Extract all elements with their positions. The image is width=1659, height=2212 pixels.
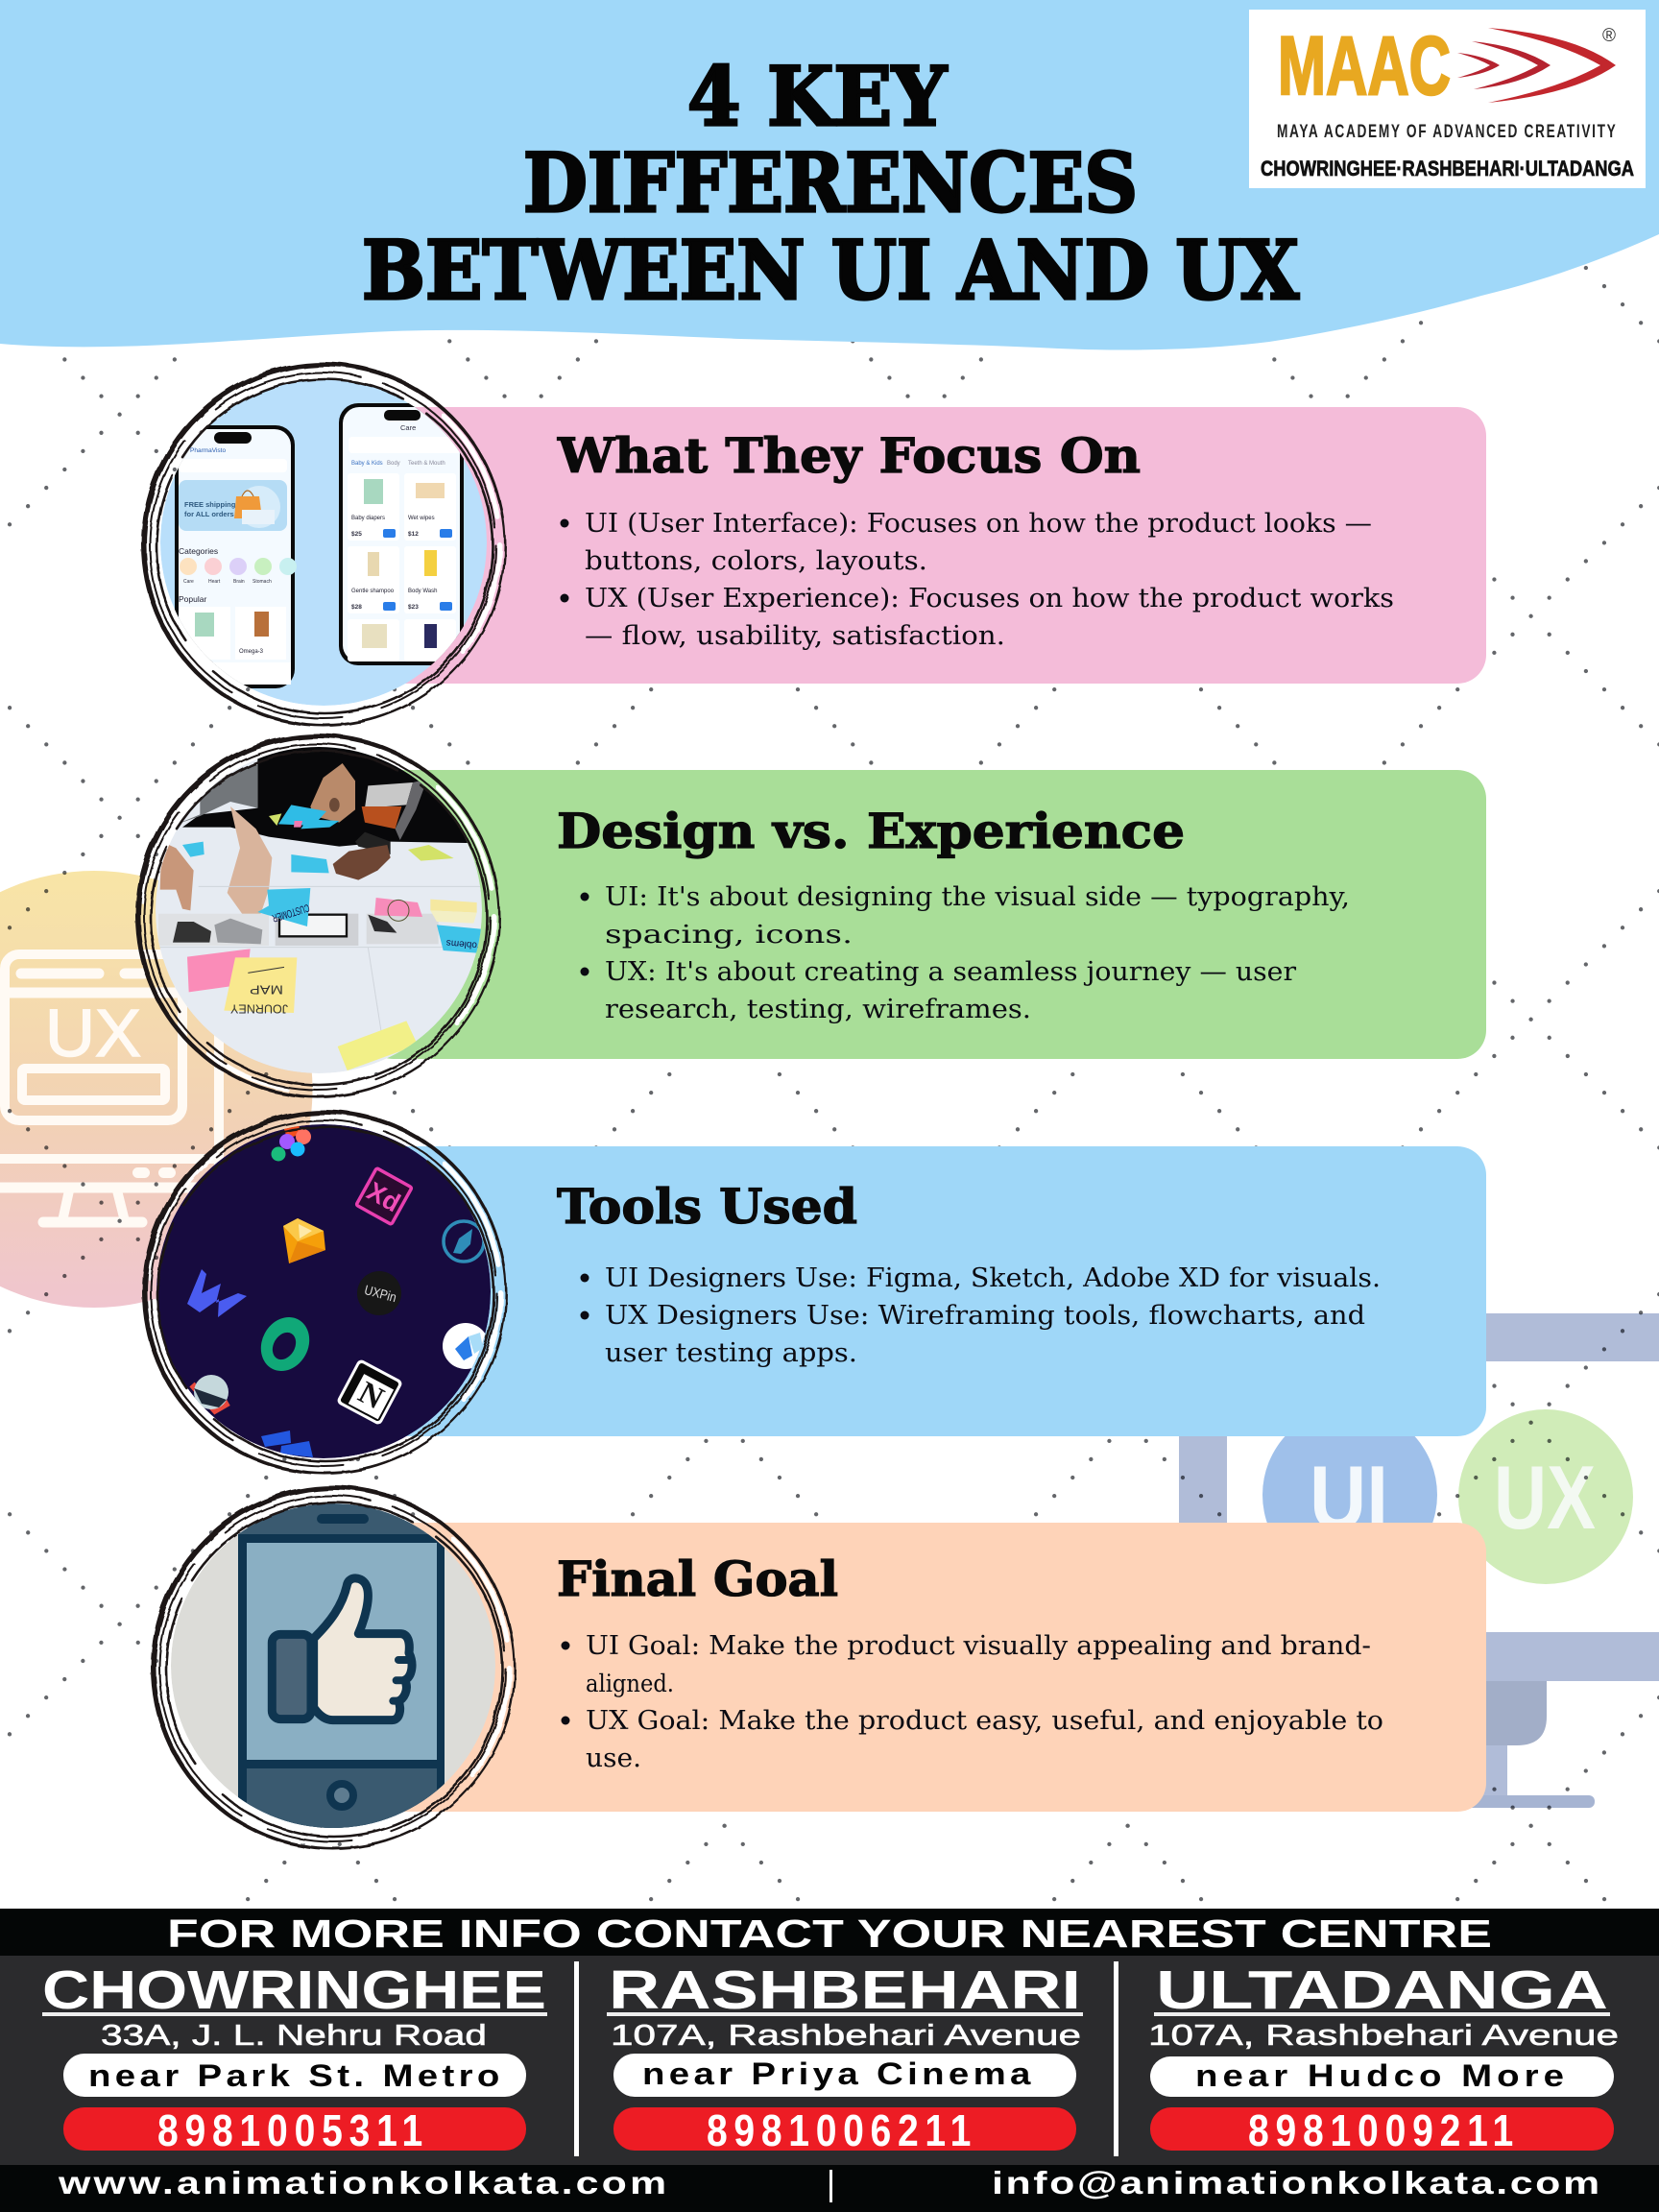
text block: aligned. bbox=[586, 1670, 674, 1697]
title: BETWEEN UI AND UX bbox=[362, 223, 1300, 318]
left phone: FREE shipping bbox=[184, 500, 236, 509]
title bbox=[362, 49, 1300, 318]
centre: chowringhee bbox=[42, 1960, 547, 2156]
website and email: info@animationkolkata.com bbox=[992, 2166, 1599, 2201]
website and email bbox=[58, 2166, 1599, 2202]
centre: rashbehari: 107A, Rashbehari Avenue bbox=[611, 2018, 1081, 2052]
centre: chowringhee: 33A, J. L. Nehru Road bbox=[101, 2018, 487, 2052]
text block bbox=[580, 1263, 1381, 1368]
panel: final goal bbox=[365, 1523, 1486, 1812]
icon: sketch bbox=[283, 1218, 325, 1263]
left phone: Brain bbox=[233, 579, 245, 585]
heading: Tools Used bbox=[557, 1178, 857, 1235]
header wave bbox=[0, 0, 1659, 350]
right phone: Teeth & Mouth bbox=[408, 461, 445, 467]
right phone: Baby & Kids bbox=[351, 461, 383, 467]
image: sticky notes photo circle: CUSTOMER bbox=[271, 902, 311, 924]
image: sticky notes photo circle bbox=[135, 733, 500, 1098]
icon: notion bbox=[336, 1358, 403, 1426]
title: 4 KEY bbox=[687, 49, 948, 144]
centre: chowringhee: CHOWRINGHEE bbox=[42, 1960, 546, 2021]
image: app phones circle bbox=[141, 362, 506, 727]
icon: white circle bbox=[443, 1323, 489, 1369]
right phone: Care bbox=[400, 423, 416, 432]
text block: UI (User Interface): Focuses on how the product looks — bbox=[585, 509, 1372, 539]
right phone: $12 bbox=[408, 531, 419, 538]
background icon: UI UX monitor bbox=[1179, 1313, 1659, 1808]
image: phone thumbs-up circle bbox=[151, 1485, 516, 1855]
icon: rocket bbox=[444, 1221, 484, 1262]
panel: design vs experience bbox=[365, 770, 1486, 1059]
right phone bbox=[339, 403, 464, 665]
centre: rashbehari bbox=[607, 1960, 1083, 2156]
left phone: Stomach bbox=[252, 579, 272, 585]
right phone: $28 bbox=[351, 604, 362, 611]
text block: UX Goal: Make the product easy, useful, and enjoyable to bbox=[586, 1706, 1383, 1736]
logo: MAAC bbox=[1249, 10, 1646, 188]
right phone: Body bbox=[387, 461, 400, 467]
footer: contact band bbox=[0, 1909, 1659, 2212]
text block bbox=[561, 1631, 1383, 1773]
background icon: UX monitor: UX bbox=[45, 996, 141, 1070]
text block: use. bbox=[586, 1743, 641, 1773]
right phone: Gentle shampoo bbox=[351, 589, 395, 594]
centre: rashbehari: RASHBEHARI bbox=[609, 1960, 1081, 2021]
text block bbox=[561, 509, 1394, 651]
centre: ultadanga: 8981009211 bbox=[1248, 2106, 1513, 2156]
left phone: Omega-3 bbox=[239, 649, 264, 655]
logo: MAAC: MAYA ACADEMY OF ADVANCED CREATIVITY bbox=[1277, 121, 1616, 142]
right phone: Wet wipes bbox=[408, 516, 435, 521]
left phone: Categories bbox=[179, 546, 218, 556]
image: sticky notes photo circle: MAP bbox=[250, 983, 283, 997]
background icon: UI UX monitor: UI bbox=[1310, 1447, 1388, 1548]
image: sticky notes photo circle: problems bbox=[445, 937, 486, 951]
faint paper lines bbox=[159, 885, 480, 1031]
centre: rashbehari: near Priya Cinema bbox=[642, 2057, 1031, 2091]
background icon: UI UX monitor: UX bbox=[1494, 1447, 1596, 1548]
logo: MAAC: MAAC bbox=[1278, 20, 1451, 112]
icon: green o bbox=[261, 1317, 309, 1371]
centre: ultadanga bbox=[1148, 1960, 1619, 2156]
text block: UI Goal: Make the product visually appealing and brand- bbox=[586, 1631, 1371, 1661]
website and email: www.animationkolkata.com bbox=[58, 2166, 666, 2201]
right phone: Body Wash bbox=[408, 589, 437, 594]
icon: bottom left mark bbox=[192, 1375, 228, 1410]
background: dot lattice bbox=[0, 213, 1659, 1922]
panel: tools used bbox=[365, 1146, 1486, 1436]
text block: UX: It's about creating a seamless journey — user bbox=[605, 957, 1296, 987]
heading: What They Focus On bbox=[557, 427, 1141, 484]
centre: ultadanga: ULTADANGA bbox=[1156, 1960, 1608, 2021]
text block: user testing apps. bbox=[605, 1338, 857, 1368]
image: sticky notes photo circle: JOURNEY bbox=[229, 1002, 288, 1016]
left phone: Care bbox=[183, 579, 194, 585]
right phone: Baby diapers bbox=[351, 516, 385, 521]
heading: Design vs. Experience bbox=[557, 803, 1185, 859]
icon: webflow bbox=[187, 1269, 247, 1317]
text block: UX Designers Use: Wireframing tools, flowcharts, and bbox=[605, 1301, 1365, 1331]
text block: UI Designers Use: Figma, Sketch, Adobe XD for visuals. bbox=[605, 1263, 1381, 1293]
text block: UI: It's about designing the visual side — typography, bbox=[605, 882, 1350, 912]
title: DIFFERENCES bbox=[523, 135, 1138, 230]
icon: thumbs up bbox=[272, 1578, 412, 1720]
panel: what they focus on bbox=[365, 407, 1486, 684]
icon: bottom blue bbox=[261, 1431, 313, 1457]
image: design tool logos circle bbox=[142, 1110, 507, 1475]
icon: figma bbox=[271, 1125, 311, 1162]
centre: ultadanga: 107A, Rashbehari Avenue bbox=[1148, 2018, 1619, 2052]
text block: UX (User Experience): Focuses on how the product works bbox=[585, 584, 1394, 613]
left phone: PharmaVisto bbox=[190, 447, 226, 454]
icon: uxpin: UXPin bbox=[363, 1282, 398, 1305]
icon: adobe xd bbox=[356, 1168, 412, 1224]
icon: adobe xd: Xd bbox=[362, 1176, 405, 1217]
text block: buttons, colors, layouts. bbox=[585, 546, 927, 576]
left phone: Popular bbox=[179, 594, 206, 604]
text block: research, testing, wireframes. bbox=[605, 995, 1031, 1024]
text block bbox=[580, 882, 1350, 1024]
left phone: Heart bbox=[208, 579, 221, 585]
centre: rashbehari: 8981006211 bbox=[707, 2106, 971, 2156]
right phone: $23 bbox=[408, 604, 419, 611]
centre: chowringhee: 8981005311 bbox=[157, 2106, 422, 2156]
icon: notion: N bbox=[352, 1376, 389, 1417]
logo: MAAC: ® bbox=[1602, 26, 1616, 46]
centre: ultadanga: near Hudco More bbox=[1195, 2059, 1564, 2093]
text block: spacing, icons. bbox=[605, 921, 853, 950]
footer heading: FOR MORE INFO CONTACT YOUR NEAREST CENTRE bbox=[167, 1911, 1492, 1956]
background icon: UX monitor bbox=[0, 871, 313, 1308]
text block: — flow, usability, satisfaction. bbox=[585, 621, 1005, 651]
right phone: $25 bbox=[351, 531, 362, 538]
centre: chowringhee: near Park St. Metro bbox=[88, 2059, 499, 2093]
heading: Final Goal bbox=[557, 1551, 838, 1607]
icon: uxpin bbox=[357, 1271, 401, 1315]
left phone bbox=[175, 425, 297, 688]
left phone: for ALL orders bbox=[184, 510, 234, 518]
